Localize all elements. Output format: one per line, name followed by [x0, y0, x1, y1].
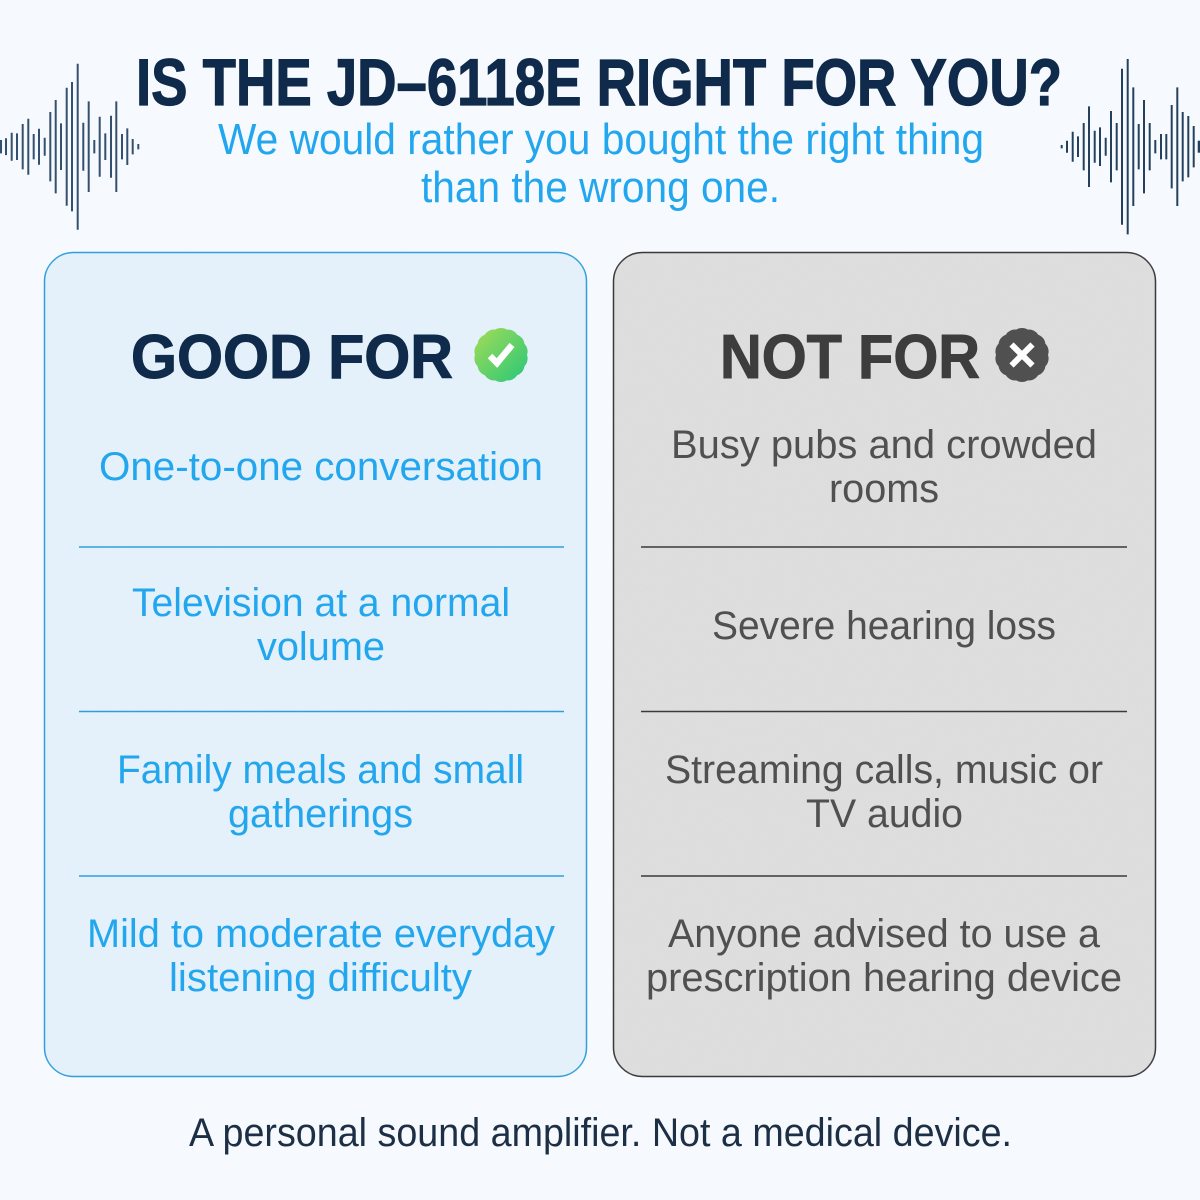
list item: busy pubs: Busy pubs and crowded	[671, 423, 1097, 467]
list item: streaming	[665, 748, 1103, 836]
panel: not for	[614, 252, 1156, 1076]
subtitle: than the wrong one.	[421, 163, 780, 212]
footer disclaimer: A personal sound amplifier. Not a medical device.	[189, 1111, 1012, 1155]
list item: television: volume	[257, 625, 385, 669]
heading: good for: GOOD FOR	[131, 323, 453, 392]
subtitle	[218, 115, 984, 212]
list item: prescription	[646, 912, 1122, 1000]
list item: mild to moderate: Mild to moderate everyday	[87, 912, 555, 956]
list item: busy pubs	[671, 423, 1097, 511]
list item: busy pubs: rooms	[829, 467, 939, 511]
list item: family meals	[117, 748, 524, 836]
icon: grey cross badge	[995, 328, 1049, 382]
list item: television: Television at a normal	[132, 581, 510, 625]
panel: good for	[44, 252, 586, 1076]
list item: family meals: Family meals and small	[117, 748, 524, 792]
list item: prescription: prescription hearing device	[646, 956, 1122, 1000]
icon: green check badge	[474, 328, 528, 382]
list item: mild to moderate: listening difficulty	[169, 956, 472, 1000]
list item: mild to moderate	[87, 912, 555, 1000]
icon: right sound wave	[1062, 59, 1199, 234]
list item: severe hearing loss: Severe hearing loss	[712, 604, 1056, 648]
list item: streaming: TV audio	[806, 792, 963, 836]
list item: one-to-one conversation: One-to-one conversation	[99, 445, 543, 489]
icon: left sound wave	[1, 64, 138, 230]
heading: not for: NOT FOR	[720, 323, 980, 392]
list item: streaming: Streaming calls, music or	[665, 748, 1103, 792]
subtitle: We would rather you bought the right thing	[218, 115, 984, 164]
list item: prescription: Anyone advised to use a	[668, 912, 1101, 956]
list item: television	[132, 581, 510, 669]
list item: family meals: gatherings	[228, 792, 413, 836]
